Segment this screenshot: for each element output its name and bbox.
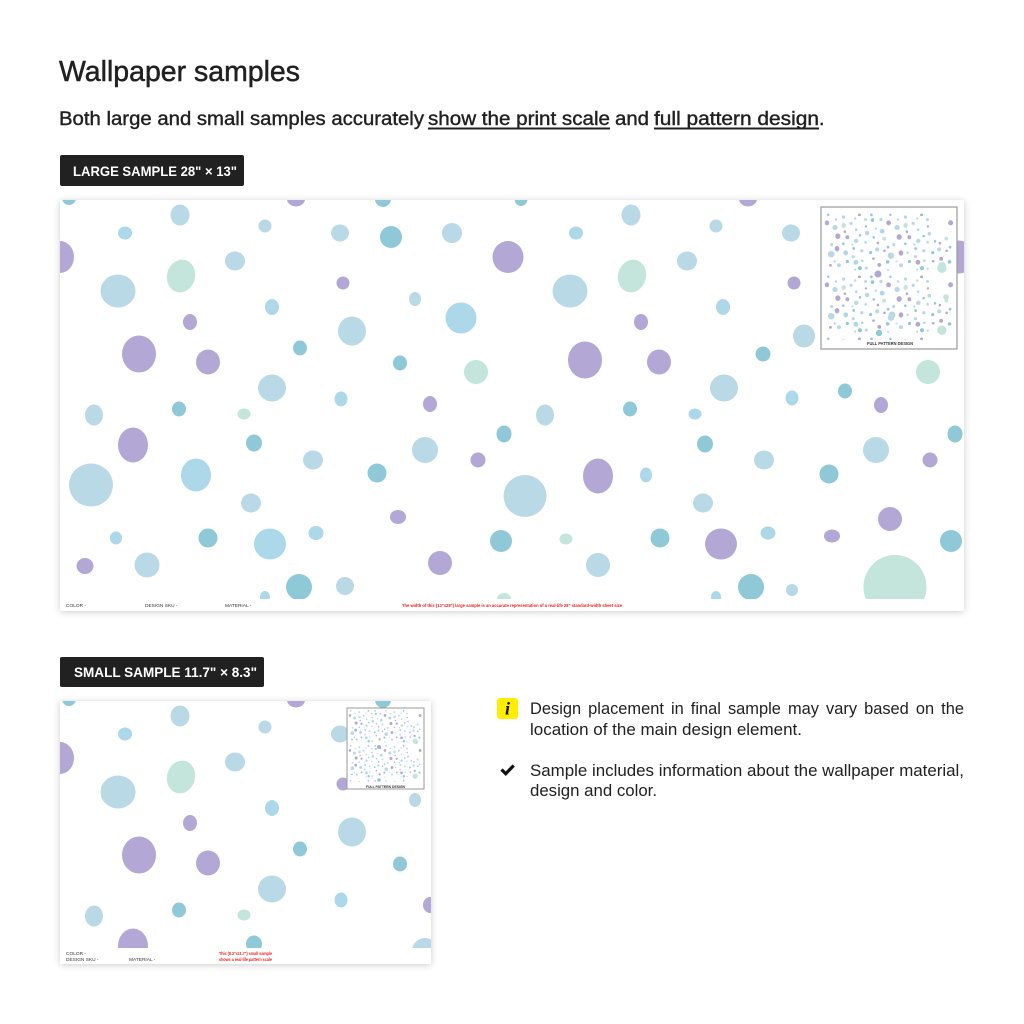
icon: info: i: [505, 698, 510, 718]
footer: large sample labels: COLOR -: [66, 603, 86, 609]
note: design placement: Design placement in final sample may vary based on the: [530, 700, 964, 718]
note: design placement: location of the main design element.: [530, 721, 802, 739]
subtitle: and: [615, 108, 649, 130]
footer: large sample labels: DESIGN SKU -: [145, 603, 178, 609]
subtitle: show the print scale: [428, 108, 610, 130]
inset: small full pattern design: FULL PATTERN DESIGN: [366, 784, 405, 789]
title: Wallpaper samples: [59, 56, 300, 88]
subtitle: full pattern design: [654, 108, 819, 130]
inset: small full pattern design: [346, 708, 424, 790]
badge: small sample: [60, 657, 264, 687]
footer: large sample labels: [66, 603, 622, 609]
footer: large sample labels: MATERIAL -: [225, 603, 252, 609]
pattern: small sample dots: [60, 701, 431, 948]
icon: check: [502, 766, 514, 774]
footer: small sample labels: DESIGN SKU -: [66, 957, 99, 963]
badge: small sample: SMALL SAMPLE 11.7" × 8.3": [74, 664, 257, 680]
note: design placement: [530, 700, 964, 739]
footer: small sample labels: This (8.3"x11.7") small sample: [219, 951, 272, 957]
note: sample information: Sample includes information about the wallpaper material,: [530, 762, 964, 780]
footer: small sample labels: COLOR -: [66, 951, 86, 957]
badge: large sample: LARGE SAMPLE 28" × 13": [73, 163, 237, 179]
inset: full pattern design: [820, 206, 958, 350]
subtitle: .: [819, 108, 824, 130]
footer: small sample labels: [66, 951, 272, 963]
panel: small sample: [57, 699, 434, 968]
footer: small sample labels: shows a real-life pattern scale: [219, 957, 272, 963]
note: sample information: [530, 762, 964, 800]
subtitle: Both large and small samples accurately: [59, 108, 424, 130]
footer: large sample labels: The width of this (13"x28") large sample is an accurate representation of a real-life 28" standard-width sheet size: [402, 603, 622, 609]
subtitle: [59, 108, 824, 130]
panel: large sample: [46, 191, 975, 619]
pattern: large sample dots: [46, 191, 975, 619]
footer: small sample labels: MATERIAL -: [129, 957, 156, 963]
icon: info: [497, 698, 518, 719]
badge: large sample: [60, 155, 244, 186]
inset: full pattern design: FULL PATTERN DESIGN: [867, 341, 913, 347]
note: sample information: design and color.: [530, 782, 657, 800]
